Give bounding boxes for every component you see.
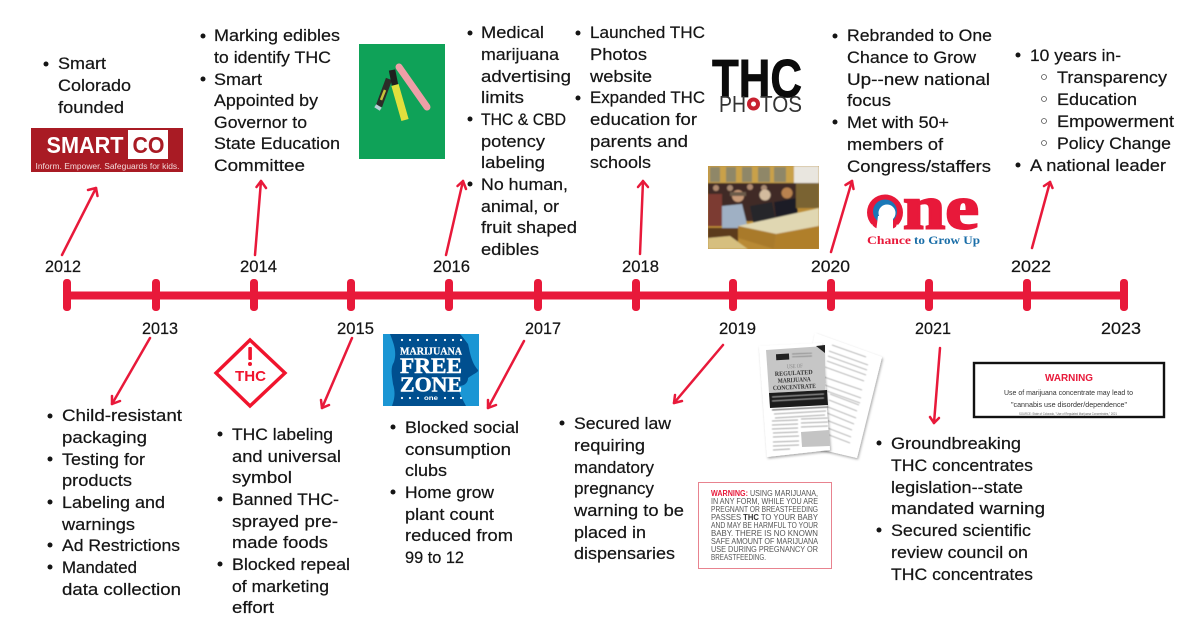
text block: 2018: Expanded THC [590, 88, 705, 107]
year labels [45, 257, 1141, 338]
text block: 2018: education for [590, 110, 697, 129]
text block: 2021: mandated warning [891, 499, 1045, 518]
text block: 2021: THC concentrates [891, 456, 1033, 475]
sign: Marijuana Free Zone [383, 334, 479, 406]
text block: 2022: Empowerment [1057, 112, 1174, 131]
front page [759, 343, 830, 457]
callout: pregnancy warning label: BABY. THERE IS NO KNOWN [711, 529, 818, 538]
text block: 2017: 99 to 12 [405, 548, 464, 567]
arrow 2015 [321, 338, 352, 408]
text block: 2013 [48, 406, 182, 599]
text block: 2015: sprayed pre- [232, 512, 338, 531]
logo: THC Photos: TOS [760, 91, 802, 117]
text block: 2022: Transparency [1057, 68, 1168, 87]
logo: Smart Colorado: Inform. Empower. Safeguards for kids. [36, 162, 180, 171]
text block: 2018: Photos [590, 45, 647, 64]
text block: 2017 [390, 418, 519, 567]
logo: Smart Colorado [31, 128, 183, 172]
logo: One Chance to Grow Up: ne [903, 174, 979, 242]
text block: 2016: marijuana [481, 45, 560, 64]
text block: 2013: data collection [62, 580, 181, 599]
text block: 2013: Child-resistant [62, 406, 182, 425]
text block: 2016: limits [481, 88, 524, 107]
front page: REGULATED [775, 369, 813, 378]
text block: 2019: Secured law [574, 414, 672, 433]
text block: 2015: THC labeling [232, 425, 333, 444]
text block: 2016: advertising [481, 67, 571, 86]
arrow 2017 [488, 341, 524, 408]
text block: 2019: placed in [574, 523, 646, 542]
front page: USE OF [787, 364, 803, 370]
logo: THC Photos: PH [719, 91, 746, 117]
text block: 2012: Smart [58, 54, 106, 73]
year 2020: 2020 [811, 257, 850, 276]
text block: 2020: Chance to Grow [847, 48, 977, 67]
text block: 2015: Banned THC- [232, 490, 339, 509]
text block: 2016: potency [481, 132, 546, 151]
text block: 2014: Appointed by [214, 91, 319, 110]
arrow 2021 [930, 348, 940, 423]
callout: pregnancy warning label: USE DURING PREGNANCY OR [711, 545, 818, 554]
year 2013: 2013 [142, 319, 178, 338]
callout: pregnancy warning label: SAFE AMOUNT OF MARIJUANA [711, 537, 819, 546]
text block: 2014: State Education [214, 134, 340, 153]
text block: 2012 [44, 54, 131, 117]
text block: 2019: requiring [574, 436, 645, 455]
text block: 2017: consumption [405, 440, 511, 459]
callout: pregnancy warning label: AND MAY BE HARMFUL TO YOUR [711, 521, 818, 530]
text block: 2020: Met with 50+ [847, 113, 949, 132]
text block: 2015 [218, 425, 350, 617]
front page: MARIJUANA [778, 376, 811, 385]
text block: 2014: Governor to [214, 113, 307, 132]
arrow 2012 [62, 188, 98, 255]
text block: 2020: Up--new national [847, 70, 990, 89]
text block: 2022: 10 years in- [1030, 46, 1121, 65]
text block: 2015: Blocked repeal [232, 555, 350, 574]
text block: 2016: No human, [481, 175, 568, 194]
callout: concentrate warning label [974, 363, 1164, 417]
text block: 2012: Colorado [58, 76, 131, 95]
icon: THC universal symbol [216, 340, 285, 406]
text block: 2020 [832, 26, 992, 176]
text block: 2014 [200, 26, 340, 175]
text block: 2015: and universal [232, 447, 341, 466]
text block: 2016: edibles [481, 240, 539, 259]
callout: concentrate warning label: SOURCE: State of Colorado, "Use of Regulated Marijuana Concentrates," 2021 [1019, 412, 1117, 416]
logo: THC Photos: THC [712, 49, 802, 109]
text block: 2018: parents and [590, 132, 688, 151]
year 2014: 2014 [240, 257, 277, 276]
text block: 2022 [1016, 46, 1174, 175]
text block: 2015: effort [232, 598, 274, 617]
text block: 2014: to identify THC [214, 48, 331, 67]
callout: pregnancy warning label: PREGNANT OR BREASTFEEDING [711, 505, 818, 514]
arrow 2013 [112, 338, 150, 404]
icon: THC universal symbol: THC [235, 368, 266, 385]
text block: 2018: Launched THC [590, 23, 705, 42]
text block: 2014: Smart [214, 70, 262, 89]
text block: 2016: labeling [481, 153, 545, 172]
text block: 2018 [576, 23, 705, 172]
text block: 2017: plant count [405, 505, 494, 524]
photo: vape pens on green [359, 44, 445, 159]
text block: 2020: Congress/staffers [847, 157, 991, 176]
text block: 2018: schools [590, 153, 651, 172]
callout: pregnancy warning label: IN ANY FORM, WHILE YOU ARE [711, 497, 818, 506]
logo: One Chance to Grow Up [867, 174, 980, 247]
callout: concentrate warning label: WARNING [1045, 372, 1093, 384]
text block: 2014: Committee [214, 156, 305, 175]
text block: 2021: THC concentrates [891, 565, 1033, 584]
photo: committee hearing room [708, 166, 819, 249]
text block: 2012: founded [58, 98, 124, 117]
text block: 2022: Policy Change [1057, 134, 1171, 153]
arrow 2018 [638, 181, 648, 254]
text block: 2016: animal, or [481, 197, 559, 216]
text block: 2014: Marking edibles [214, 26, 340, 45]
text block: 2013: Testing for [62, 450, 145, 469]
text block: 2013: Mandated [62, 558, 137, 577]
sign: Marijuana Free Zone: ZONE [400, 372, 462, 396]
logo: One Chance to Grow Up: to Grow Up [914, 233, 980, 247]
text block: 2017: clubs [405, 461, 447, 480]
callout: pregnancy warning label [698, 482, 832, 568]
text block: 2013: products [62, 471, 132, 490]
timeline bar [63, 279, 1128, 311]
text block: 2013: packaging [62, 428, 147, 447]
text block: 2019 [560, 414, 684, 563]
text block: 2017: Home grow [405, 483, 495, 502]
year 2022: 2022 [1011, 257, 1051, 276]
text block: 2015: made foods [232, 533, 328, 552]
arrow 2014 [255, 181, 266, 255]
year 2012: 2012 [45, 257, 81, 276]
callout: concentrate warning label: "cannabis use disorder/dependence" [1011, 400, 1127, 409]
back page [793, 333, 882, 458]
year 2016: 2016 [433, 257, 470, 276]
text block: 2016: Medical [481, 23, 544, 42]
callout: pregnancy warning label: PASSES THC TO YOUR BABY [711, 513, 819, 522]
text block: 2018: website [589, 67, 652, 86]
year 2023: 2023 [1101, 319, 1141, 338]
text block: 2019: warning to be [573, 501, 684, 520]
text block: 2017: reduced from [405, 526, 513, 545]
year 2021: 2021 [915, 319, 951, 338]
text block: 2016 [468, 23, 577, 259]
logo: One Chance to Grow Up: Chance [867, 233, 912, 247]
text block: 2020: members of [847, 135, 943, 154]
front page: CONCENTRATE [773, 383, 816, 392]
text block: 2021: Groundbreaking [891, 434, 1021, 453]
text block: 2020: Rebranded to One [847, 26, 992, 45]
text block: 2022: A national leader [1030, 156, 1166, 175]
callout: pregnancy warning label: BREASTFEEDING. [711, 553, 766, 562]
year 2019: 2019 [719, 319, 756, 338]
text block: 2021 [876, 434, 1045, 584]
text block: 2019: mandatory [574, 458, 654, 477]
text block: 2019: dispensaries [574, 544, 675, 563]
logo: Smart Colorado: SMART [46, 132, 124, 158]
text block: 2015: of marketing [232, 577, 329, 596]
text block: 2022: Education [1057, 90, 1137, 109]
text block: 2019: pregnancy [574, 479, 655, 498]
text block: 2016: THC & CBD [481, 110, 566, 129]
arrow 2016 [446, 181, 466, 255]
arrow 2020 [831, 181, 854, 252]
text block: 2015: symbol [232, 468, 292, 487]
text block: 2016: fruit shaped [481, 218, 577, 237]
text block: 2017: Blocked social [405, 418, 519, 437]
document: regulated marijuana concentrate flyer [759, 333, 882, 458]
callout: pregnancy warning label: WARNING: USING MARIJUANA, [711, 489, 818, 498]
sign: Marijuana Free Zone: one [424, 396, 439, 402]
year 2015: 2015 [337, 319, 374, 338]
text block: 2013: Ad Restrictions [62, 536, 180, 555]
arrow 2019 [674, 345, 723, 403]
year 2017: 2017 [525, 319, 561, 338]
year 2018: 2018 [622, 257, 659, 276]
text block: 2013: warnings [61, 515, 135, 534]
text block: 2021: Secured scientific [891, 521, 1032, 540]
logo: Smart Colorado: CO [132, 132, 164, 158]
text block: 2020: focus [847, 91, 891, 110]
sign: Marijuana Free Zone: MARIJUANA [400, 346, 463, 358]
sign: Marijuana Free Zone: FREE [400, 353, 462, 378]
text block: 2021: review council on [891, 543, 1028, 562]
text block: 2013: Labeling and [62, 493, 165, 512]
text block: 2021: legislation--state [891, 478, 1023, 497]
callout: concentrate warning label: Use of marijuana concentrate may lead to [1004, 388, 1133, 397]
arrow 2022 [1032, 182, 1052, 248]
